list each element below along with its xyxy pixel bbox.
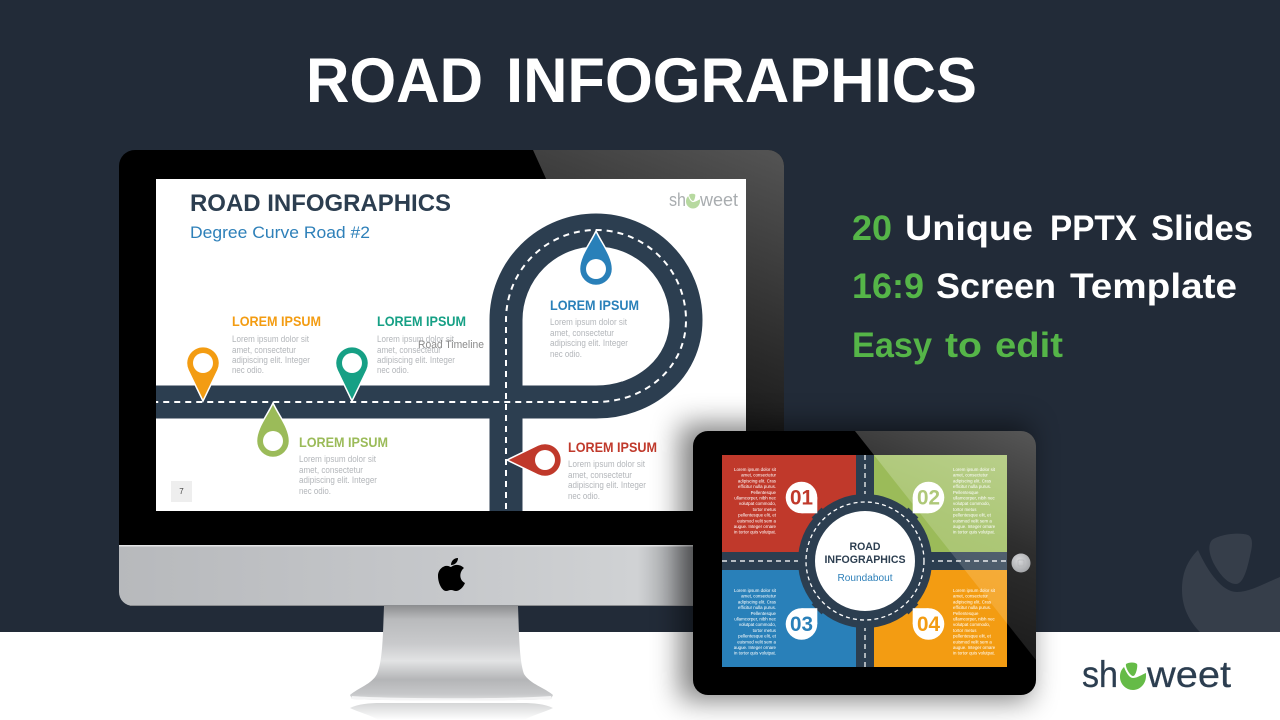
- text block: red quadrant: euismod velit sem a: [737, 518, 777, 523]
- text block: green: LOREM IPSUM: [299, 434, 388, 450]
- pin: green: [256, 403, 290, 458]
- slide title: ROAD INFOGRAPHICS: [190, 190, 451, 217]
- feature: easy to edit: edit: [995, 326, 1063, 365]
- text block: blue quadrant: in tortor quis volutpat.: [734, 651, 776, 656]
- feature: slides count: 20: [852, 209, 892, 248]
- text block: red quadrant: augue. Integer ornare: [734, 524, 777, 529]
- small showeet logo: [670, 192, 738, 208]
- badge 04: [913, 608, 944, 640]
- slide on monitor: degree curve road: [150, 179, 746, 520]
- feature: slides count: Slides: [1151, 209, 1253, 248]
- tablet: [693, 431, 1036, 695]
- feature: screen format: Template: [1070, 267, 1237, 306]
- quadrant: orange: [874, 570, 1007, 667]
- text block: red quadrant: pellentesque elit, et: [738, 513, 777, 518]
- text block: blue quadrant: pellentesque elit, et: [738, 634, 777, 639]
- text block: orange: nec odio.: [232, 365, 264, 375]
- feature: slides count: PPTX: [1050, 209, 1138, 248]
- text block: blue quadrant: adipiscing elit. Cras: [738, 599, 777, 604]
- text block: orange quadrant: ullamcorper, nibh nec: [953, 616, 996, 622]
- text block: red quadrant: efficitur nulla purus.: [738, 484, 776, 489]
- footer logo: sh: [1082, 654, 1118, 695]
- title: [306, 46, 977, 116]
- page number: [171, 481, 192, 502]
- watermark logo: [1182, 534, 1280, 632]
- text block: orange quadrant: augue. Integer ornare: [953, 645, 996, 650]
- pin: red: [507, 444, 561, 476]
- text block: red: nec odio.: [568, 491, 600, 501]
- roundabout centre: [815, 511, 915, 611]
- feature: screen format: Screen: [936, 267, 1056, 306]
- text block: green quadrant: ullamcorper, nibh nec: [953, 496, 996, 500]
- slide subtitle: Degree Curve Road #2: [190, 223, 370, 242]
- roundabout centre: INFOGRAPHICS: [824, 554, 906, 566]
- text block: green quadrant: euismod velit sem a: [953, 518, 992, 523]
- badge 03: 03: [790, 613, 813, 636]
- text block: green quadrant: pellentesque elit, et: [953, 513, 992, 518]
- text block: blue: [550, 297, 639, 359]
- roundabout centre: Roundabout: [838, 573, 893, 584]
- text block: orange: adipiscing elit. Integer: [232, 355, 310, 365]
- text block: orange quadrant: tortor metus: [953, 628, 977, 633]
- text block: green: [299, 434, 388, 496]
- text block: orange quadrant: euismod velit sem a: [953, 639, 992, 644]
- icon: apple logo: [438, 558, 465, 591]
- text block: red quadrant: adipiscing elit. Cras: [738, 478, 777, 483]
- text block: orange: amet, consectetur: [232, 345, 296, 355]
- small showeet logo: weet: [699, 190, 738, 210]
- text block: blue quadrant: volutpat commodo,: [739, 622, 776, 627]
- bezel glare: [533, 150, 784, 545]
- text block: blue: nec odio.: [550, 349, 582, 359]
- quadrant: green: [874, 455, 1007, 552]
- text block: green: Lorem ipsum dolor sit: [299, 454, 376, 464]
- white footer band: [0, 632, 1280, 720]
- text block: teal: nec odio.: [377, 365, 409, 375]
- badge 04: 04: [917, 613, 940, 636]
- badge 02: 02: [917, 486, 940, 510]
- text block: green: adipiscing elit. Integer: [299, 475, 377, 485]
- text block: red quadrant: volutpat commodo,: [739, 501, 776, 506]
- text block: blue quadrant: amet, consectetur: [741, 594, 777, 599]
- text block: teal: Lorem ipsum dolor sit: [377, 334, 454, 344]
- roundabout ring: [798, 494, 932, 628]
- text block: orange quadrant: pellentesque elit, et: [953, 634, 992, 639]
- text block: green quadrant: Pellentesque: [953, 490, 979, 495]
- slide background: [156, 179, 746, 511]
- text block: red quadrant: amet, consectetur: [741, 473, 777, 478]
- text block: red: amet, consectetur: [568, 470, 632, 480]
- desktop monitor: [119, 150, 784, 606]
- badge 01: [786, 482, 817, 513]
- footer logo: weet: [1146, 654, 1232, 695]
- text block: teal: LOREM IPSUM: [377, 313, 466, 329]
- text block: green quadrant: efficitur nulla purus.: [953, 484, 991, 489]
- title: INFOGRAPHICS: [506, 46, 977, 116]
- quadrant: blue: [722, 570, 856, 667]
- text block: teal: amet, consectetur: [377, 345, 441, 355]
- text block: orange quadrant: in tortor quis volutpat.: [953, 651, 995, 656]
- text block: blue quadrant: tortor metus: [753, 628, 777, 633]
- text block: orange: Lorem ipsum dolor sit: [232, 334, 309, 344]
- text block: blue: LOREM IPSUM: [550, 297, 639, 313]
- text block: orange quadrant: Pellentesque: [953, 611, 979, 616]
- text block: green: nec odio.: [299, 486, 331, 496]
- pin: blue: [580, 231, 612, 286]
- pin: orange: [186, 347, 220, 401]
- text block: blue: Lorem ipsum dolor sit: [550, 317, 627, 327]
- monitor bezel: [119, 150, 784, 545]
- text block: orange quadrant: Lorem ipsum dolor sit: [953, 588, 996, 593]
- label: road timeline: Road Timeline: [418, 339, 484, 351]
- text block: red quadrant: in tortor quis volutpat.: [734, 530, 776, 535]
- text block: blue quadrant: augue. Integer ornare: [734, 645, 777, 650]
- text block: red quadrant: Lorem ipsum dolor sit: [734, 467, 777, 472]
- monitor chin: [119, 545, 784, 606]
- text block: green quadrant: augue. Integer ornare: [953, 524, 996, 529]
- tablet shadow: [680, 424, 1030, 700]
- text block: blue: adipiscing elit. Integer: [550, 338, 628, 348]
- text block: blue quadrant: ullamcorper, nibh nec: [734, 616, 777, 622]
- text block: orange: [232, 313, 321, 375]
- feature: easy to edit: Easy: [852, 326, 933, 365]
- small showeet logo: sh: [669, 190, 686, 210]
- feature: screen format: [852, 267, 1237, 306]
- text block: green: amet, consectetur: [299, 465, 363, 475]
- feature: screen format: 16:9: [852, 267, 924, 306]
- text block: green quadrant: in tortor quis volutpat.: [953, 530, 995, 535]
- page number: 7: [179, 487, 184, 496]
- text block: red quadrant: tortor metus: [753, 507, 777, 512]
- text block: orange quadrant: volutpat commodo,: [953, 622, 990, 627]
- text block: blue quadrant: euismod velit sem a: [737, 639, 777, 644]
- badge 02: [913, 482, 944, 513]
- road: [150, 230, 686, 520]
- text block: green quadrant: adipiscing elit. Cras: [953, 478, 992, 483]
- text block: red: LOREM IPSUM: [568, 439, 657, 455]
- monitor stand: [350, 606, 553, 720]
- text block: orange quadrant: amet, consectetur: [953, 594, 988, 599]
- feature: easy to edit: to: [945, 326, 982, 365]
- feature list: [852, 209, 1253, 365]
- text block: red: [568, 439, 657, 501]
- text block: green quadrant: tortor metus: [953, 507, 977, 512]
- text block: blue: amet, consectetur: [550, 328, 614, 338]
- feature: slides count: [852, 209, 1253, 248]
- feature: easy to edit: [852, 326, 1063, 365]
- text block: teal: adipiscing elit. Integer: [377, 355, 455, 365]
- text block: red: Lorem ipsum dolor sit: [568, 459, 645, 469]
- badge 01: 01: [790, 486, 813, 510]
- tablet body: [693, 431, 1036, 695]
- roundabout centre: ROAD: [850, 541, 881, 553]
- roads: [722, 455, 1007, 667]
- text block: orange quadrant: adipiscing elit. Cras: [953, 599, 992, 604]
- quadrant: red: [722, 455, 856, 552]
- footer logo: [1082, 654, 1232, 695]
- text block: teal: [377, 313, 466, 375]
- text block: blue quadrant: efficitur nulla purus.: [738, 605, 776, 610]
- text block: green quadrant: volutpat commodo,: [953, 501, 990, 506]
- tablet screen: roundabout: [722, 455, 1007, 667]
- text block: orange quadrant: efficitur nulla purus.: [953, 605, 991, 610]
- text block: green quadrant: Lorem ipsum dolor sit: [953, 467, 996, 472]
- pin: teal: [336, 347, 368, 401]
- text block: red: adipiscing elit. Integer: [568, 480, 646, 490]
- text block: red quadrant: Pellentesque: [751, 490, 777, 495]
- text block: blue quadrant: Lorem ipsum dolor sit: [734, 588, 777, 593]
- icon: home button: [1012, 554, 1030, 572]
- text block: blue quadrant: Pellentesque: [751, 611, 777, 616]
- title: ROAD: [306, 46, 483, 116]
- feature: slides count: Unique: [905, 209, 1033, 248]
- text block: green quadrant: amet, consectetur: [953, 473, 988, 478]
- text block: orange: LOREM IPSUM: [232, 313, 321, 329]
- tablet glare: [855, 431, 1036, 660]
- text block: red quadrant: ullamcorper, nibh nec: [734, 496, 777, 500]
- badge 03: [786, 608, 817, 640]
